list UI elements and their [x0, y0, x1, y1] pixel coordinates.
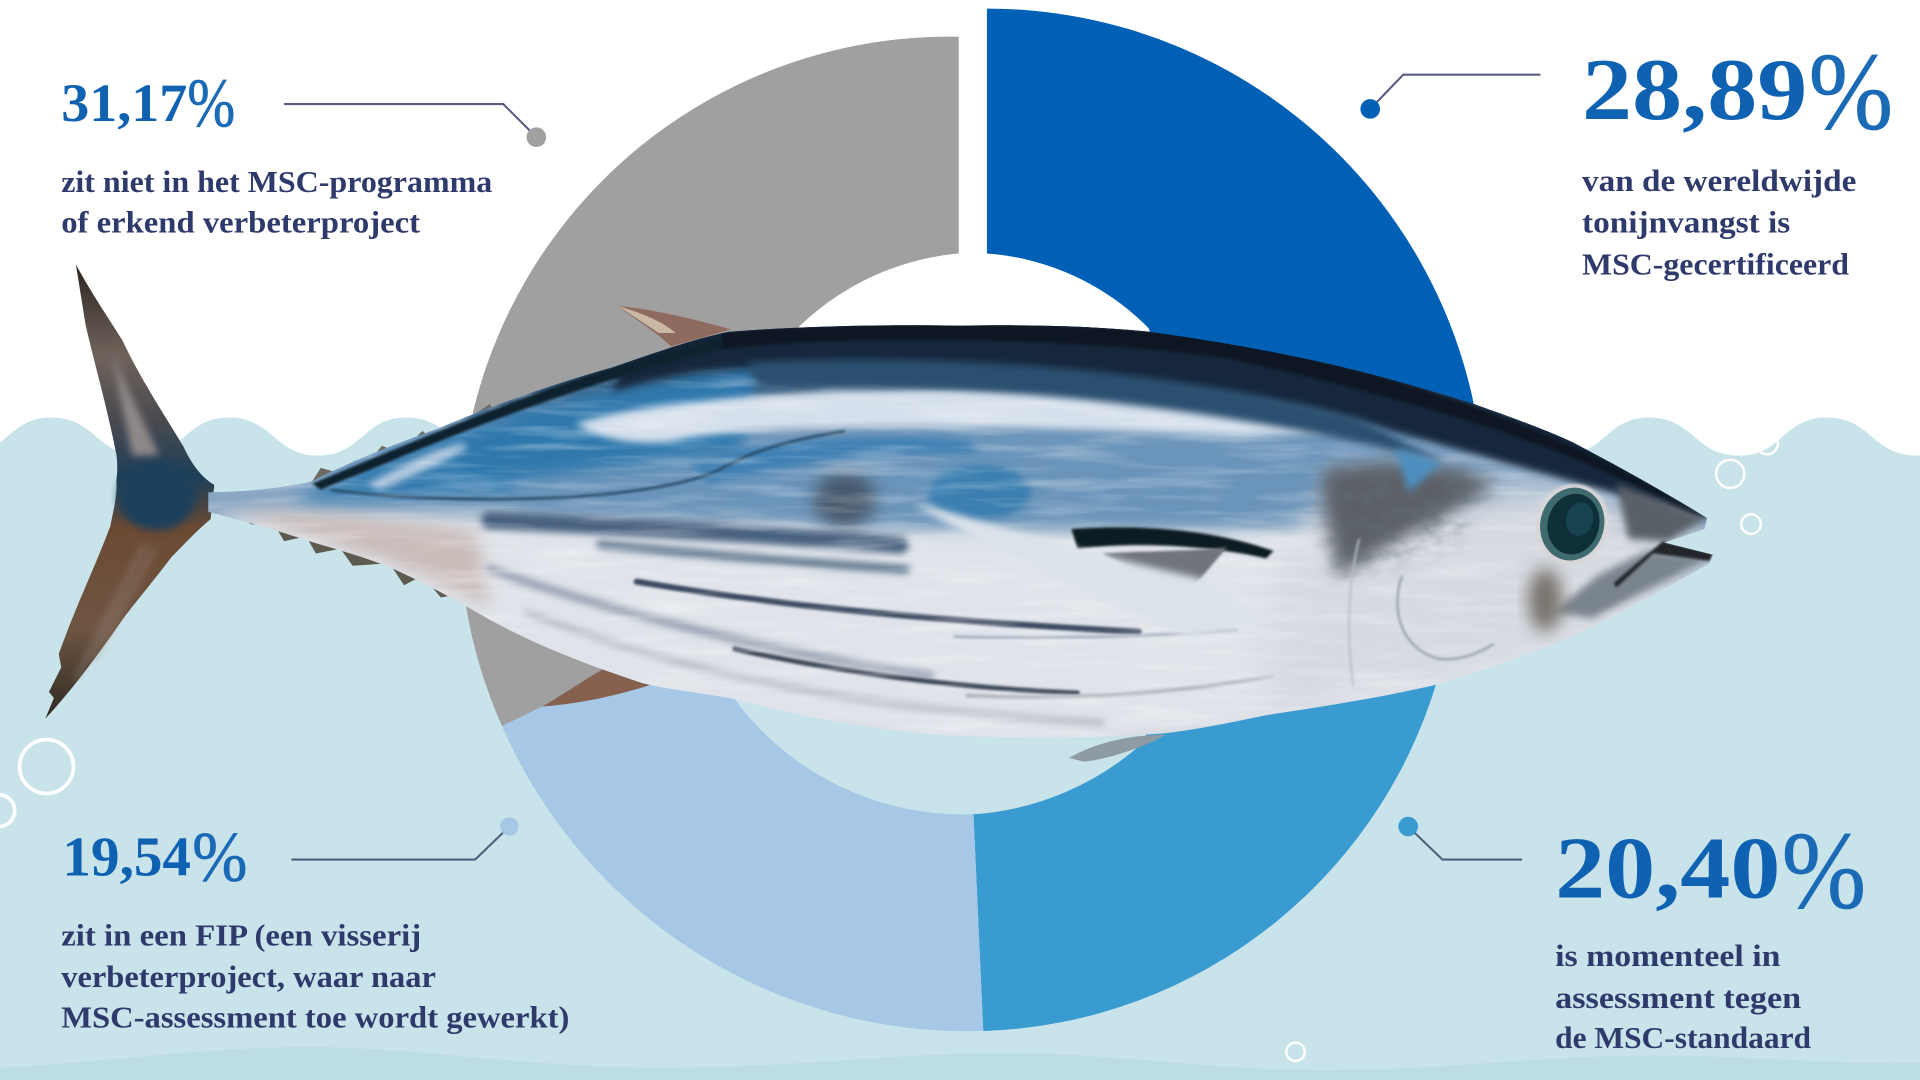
value 19,54%: [62, 818, 247, 896]
gill cover lines: [1349, 539, 1494, 686]
gill dark patch: [1322, 463, 1494, 576]
callout: 20,40%: [1398, 809, 1866, 1055]
value 28,89%: 28,89: [1582, 41, 1807, 139]
fish tail: [45, 264, 214, 719]
description 20,40%: is momenteel in: [1555, 939, 1780, 973]
value 19,54%: %: [192, 818, 247, 896]
bubbles: [0, 432, 1778, 1061]
gill blue accents: [1396, 448, 1442, 492]
gill mottling: [1316, 465, 1500, 582]
description 31,17%: zit niet in het MSC-programma: [61, 165, 492, 199]
background: water with waves: [0, 418, 1920, 1080]
value 28,89%: %: [1809, 31, 1893, 153]
blue patch behind pectoral: [928, 465, 1031, 519]
navy shading on back: [747, 359, 1445, 463]
value 20,40%: [1555, 809, 1866, 931]
dark back band: [612, 321, 1714, 520]
tail detail: lower streaks: [76, 545, 154, 680]
description 20,40%: de MSC-standaard: [1555, 1021, 1811, 1055]
value 19,54%: 19,54: [62, 827, 191, 889]
description 28,89%: MSC-gecertificeerd: [1582, 247, 1849, 281]
body lower silver: [212, 504, 1436, 738]
leader line and dot: mid blue: [1398, 817, 1522, 860]
fish body: [196, 318, 1727, 753]
value 31,17%: [61, 65, 235, 141]
pectoral fin: [912, 502, 1273, 637]
dark flank patch: [813, 473, 877, 527]
donut chart: [459, 9, 1484, 1031]
value 20,40%: 20,40: [1555, 820, 1780, 918]
cheek brown: [1528, 568, 1562, 632]
value 28,89%: [1582, 31, 1893, 153]
fish fins: [239, 306, 1166, 762]
segment: 19,54% light blue: [502, 637, 983, 1031]
leader line and dot: dark blue: [1360, 75, 1540, 119]
dark dorsal edge near tail: [312, 333, 747, 490]
background: bottom wave: [0, 1047, 1920, 1080]
jaw shading: [1553, 551, 1709, 618]
segment: 31,17% gray: [459, 37, 959, 726]
streak texture light: [208, 368, 1620, 724]
leader line and dot: light blue: [291, 817, 519, 860]
description 28,89%: tonijnvangst is: [1582, 206, 1790, 240]
description 19,54%: MSC-assessment toe wordt gewerkt): [61, 1000, 569, 1034]
value 31,17%: %: [187, 65, 235, 141]
description 31,17%: of erkend verbeterproject: [61, 206, 421, 240]
value 20,40%: %: [1782, 809, 1866, 931]
blue back: [294, 367, 759, 500]
black top edge: [722, 325, 1707, 518]
leader line and dot: gray: [284, 104, 546, 147]
light stripe near tail: [367, 443, 468, 490]
description 19,54%: zit in een FIP (een visserij: [61, 918, 421, 952]
illustration: tuna fish: [45, 264, 1727, 762]
tail detail: light centre: [113, 355, 159, 456]
description 28,89%: van de wereldwijde: [1582, 164, 1856, 198]
segment: 28,89% dark blue: [987, 9, 1484, 490]
head silver: [1261, 484, 1714, 722]
belly stripes: [490, 520, 1273, 722]
segment: 20,40% mid blue: [973, 661, 1442, 1031]
description 20,40%: assessment tegen: [1555, 981, 1801, 1015]
body tail-end pink belly: [233, 512, 490, 606]
callout: 31,17%: [61, 65, 546, 240]
blue streak upper flank: [686, 437, 980, 484]
callout: 19,54%: [61, 817, 569, 1034]
fish eye: [1526, 476, 1618, 573]
white stripe upper: [576, 389, 1384, 443]
tail detail: blue base: [118, 462, 196, 530]
value 31,17%: 31,17: [61, 73, 187, 133]
blue-gray flank: [514, 431, 1335, 527]
callout: 28,89%: [1360, 31, 1893, 281]
lateral line: [331, 431, 845, 499]
description 19,54%: verbeterproject, waar naar: [61, 960, 436, 994]
mouth line: [1614, 541, 1713, 588]
